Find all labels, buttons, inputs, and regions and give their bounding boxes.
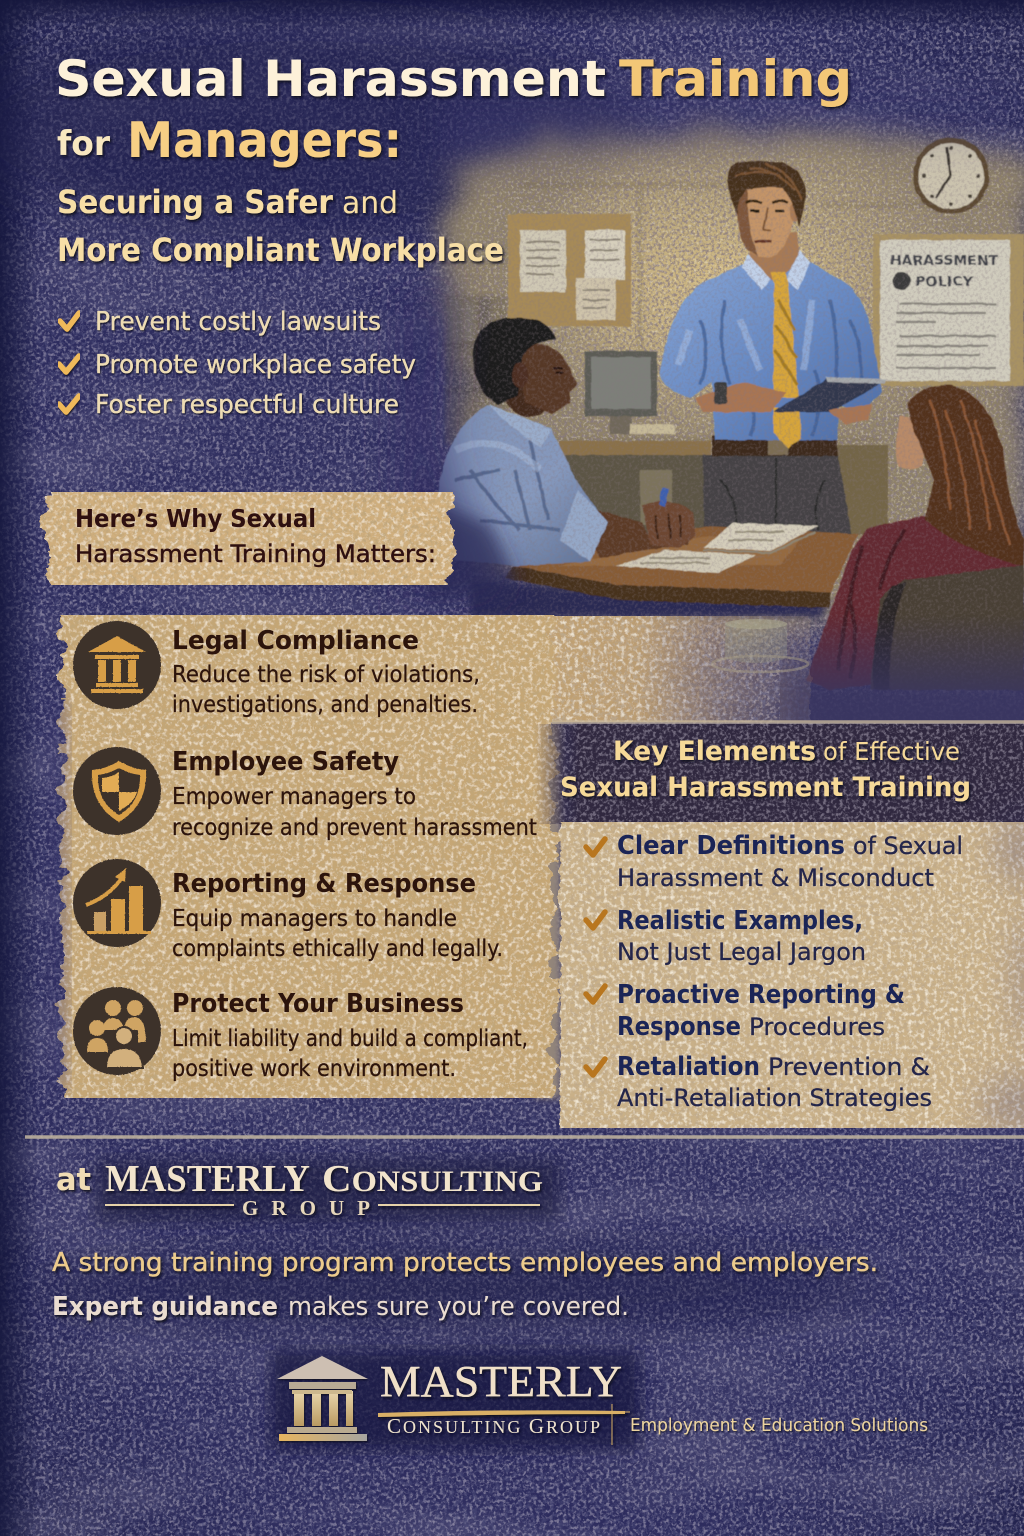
brand line: at Masterly Consulting Group: CONSULTING [322, 1158, 543, 1200]
scene: light grain and fade overlay [380, 88, 1024, 730]
banner text: Harassment Training Matters: [75, 540, 436, 568]
wall shelf [445, 295, 507, 445]
banner text: Here’s Why Sexual [75, 504, 316, 533]
brand line: at Masterly Consulting Group: GROUP [242, 1196, 370, 1220]
icon: rising chart [73, 859, 161, 947]
wall clock [913, 138, 989, 214]
protect text: positive work environment. [172, 1056, 456, 1082]
employee safety text: Empower managers to [172, 784, 416, 810]
key elements heading text: of Effective [823, 737, 960, 766]
benefit checklist [59, 307, 416, 420]
title block [55, 50, 852, 269]
icon: gold check marks [586, 839, 605, 1075]
panel blue staining [980, 814, 1024, 1135]
icon: check marks [59, 313, 79, 412]
checklist text: Promote workplace safety [95, 350, 416, 380]
checklist: clear definitions [617, 831, 963, 892]
checklist: proactive reporting: Proactive Reporting & [617, 980, 905, 1010]
brand line: at Masterly Consulting Group: at [56, 1162, 91, 1198]
poster: harassment policy: HARASSMENT [890, 253, 999, 269]
banner: why training matters [46, 492, 452, 585]
banner text [75, 504, 436, 568]
scene: warm wall with grain [423, 106, 1024, 684]
key elements heading text [560, 736, 971, 803]
table with papers [505, 523, 858, 608]
employee safety text: Employee Safety [172, 747, 399, 777]
checklist text: Prevent costly lawsuits [95, 307, 381, 337]
employee safety text: recognize and prevent harassment [172, 815, 537, 841]
icon: team [73, 987, 161, 1075]
icon: courthouse [73, 621, 161, 709]
seated employee [438, 318, 696, 566]
checklist: proactive reporting: Response [617, 1012, 741, 1042]
panel edge staining [52, 700, 66, 1090]
checklist: clear definitions: Harassment & Misconduct [617, 864, 934, 892]
panel: key elements heading band [535, 722, 1024, 824]
closing statement [52, 1248, 878, 1322]
closing statement: A strong training program protects employees and employers. [52, 1248, 878, 1278]
illustration: office scene with manager and two employees [380, 88, 1024, 730]
coffee mug on lower table [712, 619, 808, 672]
subtitle word: and: and [342, 186, 398, 221]
logo tagline: Employment & Education Solutions [630, 1415, 928, 1436]
panel extension fading into the scene [530, 616, 810, 722]
poster: harassment policy: POLICY [915, 274, 973, 290]
back desk and monitor [559, 351, 888, 535]
protect text: Protect Your Business [172, 989, 464, 1019]
reporting text [172, 869, 503, 962]
standing manager [659, 161, 886, 535]
tan filler between panels [535, 722, 561, 1098]
icon: temple logo [277, 1356, 368, 1441]
checklist: proactive reporting [617, 980, 905, 1042]
title highlight: Training: Training [619, 50, 852, 108]
shadow under table [470, 580, 830, 618]
item: reporting and response [73, 859, 503, 962]
title line 2: for: for [57, 124, 110, 164]
employee safety text [172, 747, 537, 841]
poster: harassment policy [873, 234, 1024, 386]
protect text [172, 989, 528, 1082]
closing statement: makes sure you’re covered. [288, 1292, 629, 1322]
panel: why it matters [52, 615, 810, 1098]
reporting text: Equip managers to handle [172, 906, 457, 932]
reporting text: complaints ethically and legally. [172, 936, 503, 962]
panel: key elements checklist [560, 814, 1024, 1135]
checklist: proactive reporting: Procedures [749, 1013, 885, 1041]
checklist: retaliation prevention: Prevention & [768, 1053, 930, 1081]
seated woman from behind [806, 385, 1024, 690]
brand line: at Masterly Consulting Group [56, 1158, 543, 1220]
legal compliance text [172, 626, 480, 718]
legal compliance text: Reduce the risk of violations, [172, 662, 480, 688]
checklist: realistic examples: Not Just Legal Jargon [617, 938, 866, 966]
checklist text [95, 307, 416, 420]
protect text: Limit liability and build a compliant, [172, 1026, 528, 1052]
checklist: clear definitions: of Sexual [853, 832, 963, 860]
checklist: retaliation prevention: Anti-Retaliation Strategies [617, 1084, 932, 1112]
checklist: realistic examples [617, 906, 866, 966]
legal compliance text: Legal Compliance [172, 626, 419, 656]
closing statement: Expert guidance [52, 1292, 278, 1322]
key elements heading text: Sexual Harassment Training [560, 772, 971, 803]
checklist: retaliation prevention: Retaliation [617, 1052, 760, 1082]
key elements heading text: Key Elements [613, 736, 816, 767]
item: protect your business [73, 987, 528, 1082]
brand line: at Masterly Consulting Group: MASTERLY [105, 1158, 310, 1200]
item: employee safety [73, 747, 537, 841]
item: legal compliance [73, 621, 480, 718]
subtitle line 1: Securing a Safer [57, 183, 333, 221]
checklist: retaliation prevention [617, 1052, 932, 1112]
icon: shield [73, 747, 161, 835]
legal compliance text: investigations, and penalties. [172, 692, 478, 718]
checklist: realistic examples: Realistic Examples, [617, 906, 863, 936]
title line 1: Sexual Harassment [55, 50, 606, 108]
logo wordmark: MASTERLY [380, 1357, 622, 1406]
subtitle line 2: More Compliant Workplace [57, 231, 504, 269]
checklist text: Foster respectful culture [95, 390, 399, 420]
cork board with notices [508, 214, 631, 326]
checklist: clear definitions: Clear Definitions [617, 831, 845, 861]
logo wordmark [378, 1357, 630, 1445]
logo: Masterly Consulting Group [277, 1356, 928, 1445]
title highlight: Managers: Managers: [127, 112, 402, 169]
logo wordmark: CONSULTING GROUP [387, 1414, 600, 1438]
reporting text: Reporting & Response [172, 869, 476, 899]
